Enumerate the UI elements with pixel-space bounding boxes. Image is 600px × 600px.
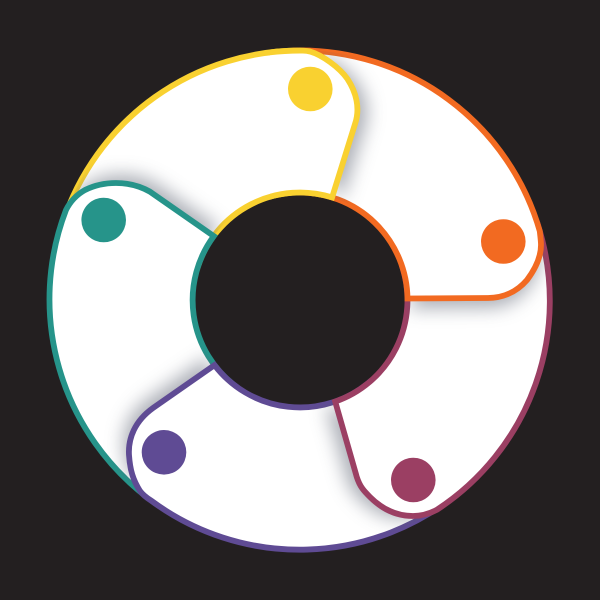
infographic: five segment ring xyxy=(46,48,553,553)
panel: purple segment xyxy=(123,356,460,550)
panel: orange segment xyxy=(296,50,541,308)
icon: teal dot xyxy=(81,198,126,242)
panel: teal segment xyxy=(49,174,235,499)
panel: yellow segment base xyxy=(63,51,357,267)
icon: orange dot xyxy=(481,219,526,264)
icon: yellow dot xyxy=(288,67,333,111)
icon: purple dot xyxy=(142,430,186,475)
panel: crimson segment xyxy=(325,225,550,519)
icon: crimson dot xyxy=(391,458,436,502)
panel: yellow segment head overlapping orange xyxy=(270,48,378,202)
